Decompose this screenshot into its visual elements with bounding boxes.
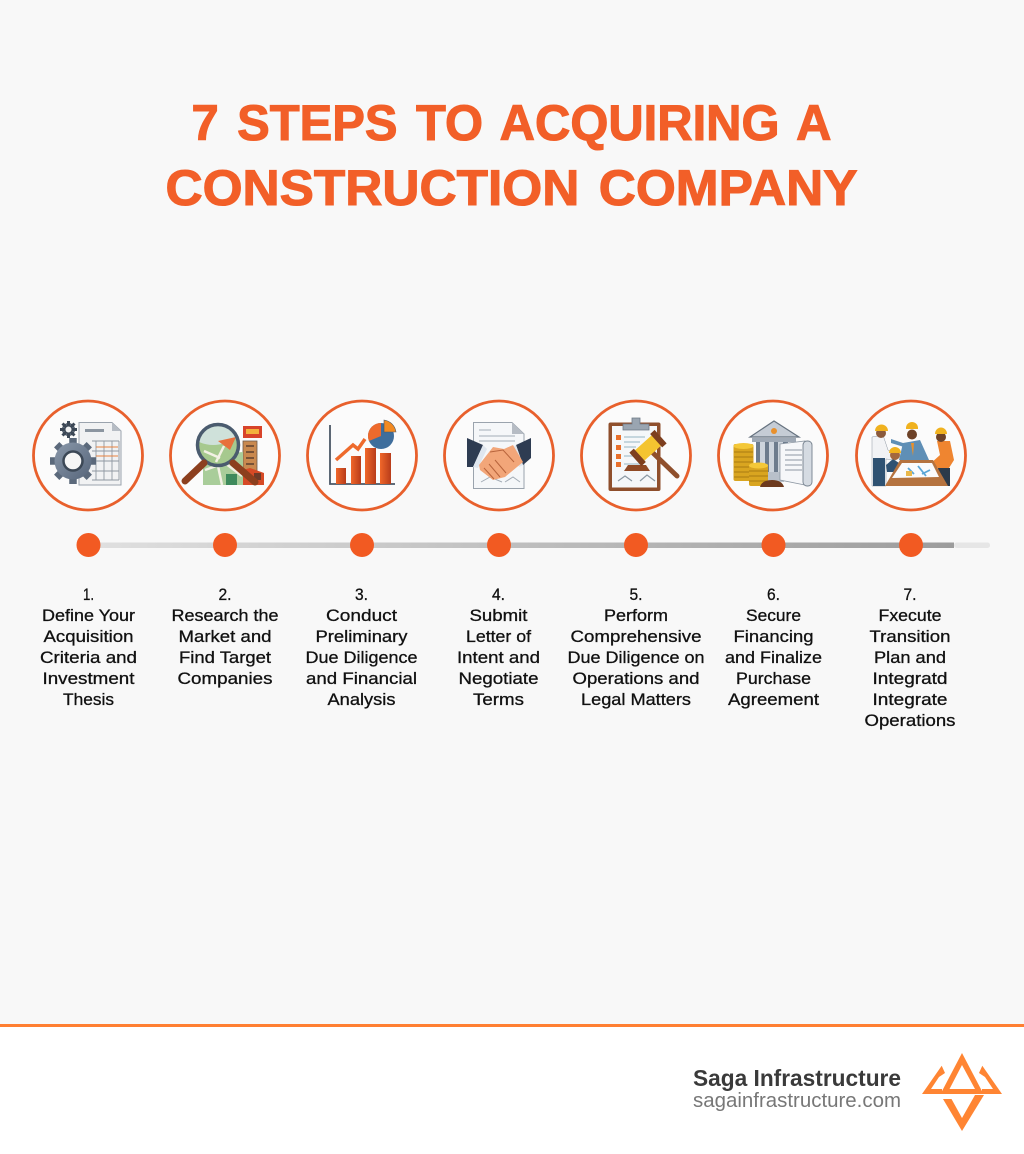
- step 6 label: Secure: [746, 606, 801, 625]
- step 5 label: Due Diligence on: [568, 648, 704, 667]
- brand name: Saga Infrastructure: [693, 1065, 901, 1091]
- step 4 label: Negotiate: [458, 669, 538, 688]
- step 3 label: Preliminary: [316, 627, 408, 646]
- step 4 label: Terms: [473, 690, 524, 709]
- icon ring 2: [170, 401, 280, 510]
- step 3 label: 3.: [355, 585, 368, 604]
- step 1 label: [40, 585, 137, 709]
- step 1 label: 1.: [83, 585, 94, 604]
- step 6 label: and Finalize: [725, 648, 822, 667]
- step 5 label: Operations and: [572, 669, 700, 688]
- step 5: [568, 401, 704, 709]
- step 7 label: Integrate: [872, 690, 948, 709]
- timeline dot 6: [762, 533, 786, 557]
- icon: gear and spreadsheet: [50, 421, 121, 485]
- timeline dot 3: [350, 533, 374, 557]
- step 5 label: [568, 585, 704, 709]
- icon: bank, coins and contract scroll: [734, 421, 812, 487]
- step 5 label: Comprehensive: [570, 627, 702, 646]
- step 1 label: Investment: [42, 669, 135, 688]
- title: [166, 95, 858, 216]
- step 1: [34, 401, 142, 709]
- footer band: [0, 1024, 1024, 1154]
- icon ring 1: [34, 401, 142, 510]
- step 6 label: 6.: [767, 585, 780, 604]
- step 1 label: Thesis: [63, 690, 114, 709]
- step 6: [718, 401, 828, 709]
- brand url: sagainfrastructure.com: [693, 1090, 901, 1112]
- step 2 label: Research the: [172, 606, 278, 625]
- step 4 label: 4.: [492, 585, 505, 604]
- timeline dot 1: [76, 533, 100, 557]
- step 5 label: Legal Matters: [581, 690, 691, 709]
- icon: clipboard and gavel: [608, 418, 677, 491]
- icon: handshake over contract: [467, 422, 531, 488]
- step 7 label: Integratd: [872, 669, 948, 688]
- icon ring 7: [856, 401, 966, 510]
- timeline dot 5: [624, 533, 648, 557]
- icon ring 5: [582, 401, 690, 510]
- step 7 label: 7.: [904, 585, 916, 604]
- step 3 label: [306, 585, 418, 709]
- step 7 label: Plan and: [874, 648, 946, 667]
- step 4 label: Submit: [470, 606, 528, 625]
- step 3: [306, 401, 418, 709]
- step 4 label: [457, 585, 540, 709]
- timeline dot 2: [213, 533, 237, 557]
- step 6 label: Financing: [734, 627, 814, 646]
- icon: Saga logo: [922, 1053, 1002, 1131]
- step 2 label: [172, 585, 278, 688]
- icon: construction team around plans: [872, 422, 954, 486]
- icon ring 4: [444, 401, 554, 510]
- step 2 label: Market and: [178, 627, 272, 646]
- title: CONSTRUCTION COMPANY: [166, 160, 858, 216]
- timeline dot 4: [487, 533, 511, 557]
- step 7 label: Transition: [870, 627, 950, 646]
- step 4 label: Intent and: [457, 648, 540, 667]
- icon: magnifier over map and buildings: [185, 424, 264, 485]
- step 7: [856, 401, 966, 730]
- step 3 label: and Financial: [306, 669, 417, 688]
- step 7 label: Operations: [864, 711, 956, 730]
- step 1 label: Criteria and: [40, 648, 137, 667]
- step 4 label: Letter of: [466, 627, 531, 646]
- step 2 label: Companies: [178, 669, 272, 688]
- step 7 label: [864, 585, 956, 730]
- step 1 label: Acquisition: [44, 627, 134, 646]
- step 4: [444, 401, 554, 709]
- step 1 label: Define Your: [42, 606, 135, 625]
- step 3 label: Due Diligence: [306, 648, 418, 667]
- step 2 label: Find Target: [179, 648, 271, 667]
- icon: bar chart with trend line and pie: [330, 420, 396, 484]
- step 3 label: Conduct: [326, 606, 397, 625]
- step 2 label: 2.: [218, 585, 232, 604]
- icon ring 3: [308, 401, 416, 510]
- timeline dot 7: [899, 533, 923, 557]
- step 6 label: Purchase: [736, 669, 811, 688]
- step 5 label: Perform: [604, 606, 668, 625]
- timeline connector line: [88, 542, 990, 548]
- title: 7 STEPS TO ACQUIRING A: [192, 95, 832, 151]
- icon ring 6: [718, 401, 828, 510]
- step 5 label: 5.: [630, 585, 642, 604]
- step 6 label: Agreement: [728, 690, 819, 709]
- step 3 label: Analysis: [328, 690, 396, 709]
- step 7 label: Fxecute: [878, 606, 942, 625]
- step 2: [170, 401, 280, 688]
- step 6 label: [725, 585, 822, 709]
